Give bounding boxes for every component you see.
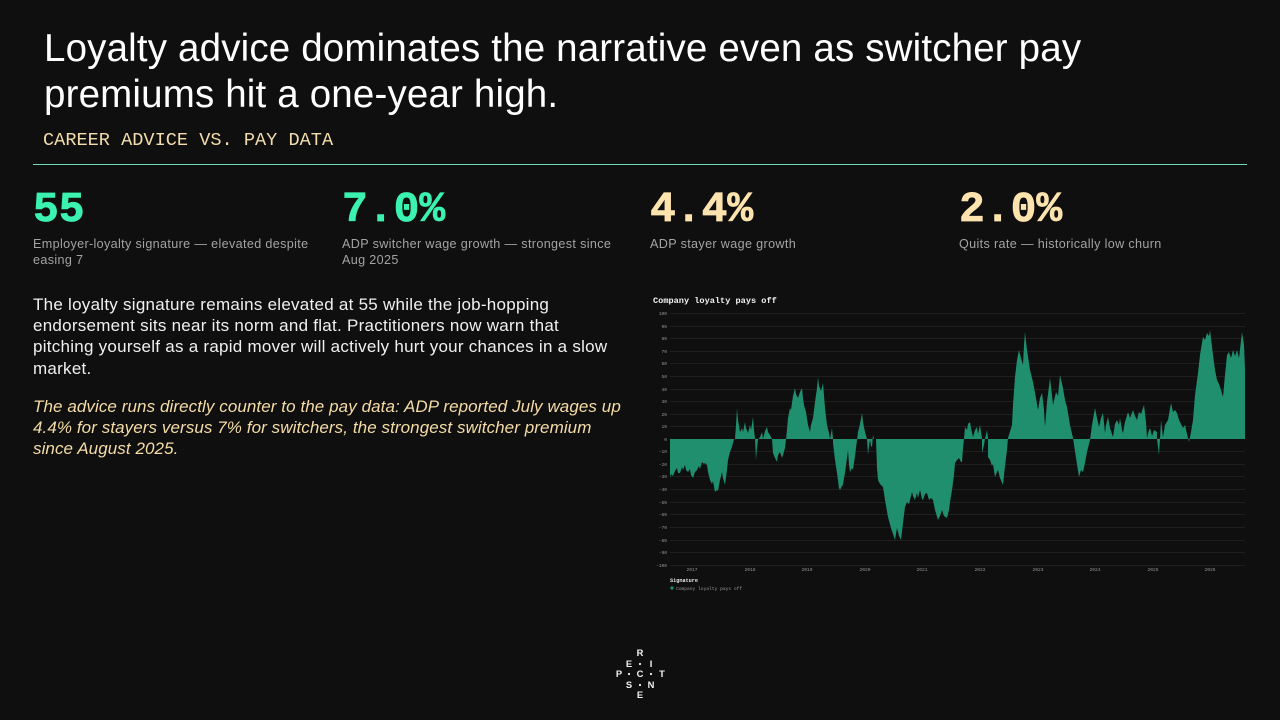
body paragraph: The loyalty signature remains elevated at 55 while the job-hopping	[33, 295, 549, 314]
stat: ADP switcher wage growth: ADP switcher wage growth — strongest since	[342, 237, 611, 251]
y axis labels: -80	[659, 538, 667, 544]
stat: ADP stayer wage growth	[650, 185, 796, 251]
stat: quits rate	[959, 185, 1162, 251]
y axis labels: 90	[661, 324, 667, 330]
y axis labels: 60	[661, 361, 667, 367]
title: Loyalty advice dominates the narrative even as switcher pay	[44, 27, 1081, 70]
body paragraph: endorsement sits near its norm and flat. Practitioners now warn that	[33, 316, 559, 335]
x axis labels: 2019	[801, 567, 813, 573]
body paragraph: pitching yourself as a rapid mover will actively hurt your chances in a slow	[33, 337, 607, 356]
italic callout paragraph	[33, 397, 621, 458]
y axis labels: -30	[659, 474, 667, 480]
x axis labels: 2020	[859, 567, 871, 573]
italic callout paragraph: since August 2025.	[33, 439, 178, 458]
logo: letter diamond	[616, 647, 665, 700]
legend	[670, 578, 742, 592]
area chart: company loyalty pays off	[653, 296, 1245, 592]
y axis labels: -90	[659, 550, 667, 556]
area series	[670, 330, 1245, 540]
stat: employer-loyalty signature: Employer-loyalty signature — elevated despite	[33, 237, 308, 251]
y axis labels: 20	[661, 412, 667, 418]
stat: ADP stayer wage growth: ADP stayer wage growth	[650, 237, 796, 251]
y axis labels: 10	[661, 424, 667, 430]
body paragraph: market.	[33, 359, 92, 378]
y axis labels: 40	[661, 387, 667, 393]
y axis labels: -60	[659, 512, 667, 518]
x axis labels: 2018	[744, 567, 756, 573]
x axis labels: 2022	[974, 567, 986, 573]
subtitle: CAREER ADVICE VS. PAY DATA	[43, 130, 333, 151]
title: premiums hit a one-year high.	[44, 72, 558, 116]
logo: letter diamond: S	[626, 679, 632, 690]
stat: quits rate: 2.0%	[959, 185, 1062, 234]
y axis labels	[656, 311, 667, 569]
logo: letter diamond: P	[616, 668, 622, 679]
logo: letter diamond: E	[626, 658, 632, 669]
logo: letter diamond: I	[650, 658, 652, 669]
italic callout paragraph: 4.4% for stayers versus 7% for switchers, the strongest switcher premium	[33, 418, 591, 437]
y axis labels: 80	[661, 336, 667, 342]
y axis labels: -20	[659, 462, 667, 468]
logo: letter diamond: N	[648, 679, 655, 690]
legend: Signature	[670, 578, 698, 584]
logo: letter diamond: R	[637, 647, 644, 658]
y axis labels: 70	[661, 349, 667, 355]
chart title: Company loyalty pays off	[653, 296, 777, 306]
stat: quits rate: Quits rate — historically low churn	[959, 237, 1162, 251]
stat: ADP switcher wage growth	[342, 185, 611, 267]
x axis labels: 2026	[1204, 567, 1216, 573]
stat: ADP switcher wage growth: 7.0%	[342, 185, 445, 234]
y axis labels: 0	[664, 437, 667, 443]
y axis labels: -10	[659, 449, 667, 455]
x axis labels: 2017	[686, 567, 698, 573]
italic callout paragraph: The advice runs directly counter to the pay data: ADP reported July wages up	[33, 397, 621, 416]
x axis labels	[686, 567, 1216, 573]
logo: letter diamond: T	[659, 668, 665, 679]
y axis labels: 50	[661, 374, 667, 380]
legend: Company loyalty pays off	[676, 586, 742, 592]
x axis labels: 2024	[1089, 567, 1101, 573]
stat: employer-loyalty signature: easing 7	[33, 253, 83, 267]
logo: letter diamond: E	[637, 689, 643, 700]
y axis labels: 100	[659, 311, 667, 317]
body paragraph	[33, 295, 608, 378]
stat: ADP stayer wage growth: 4.4%	[650, 185, 753, 234]
x axis labels: 2025	[1147, 567, 1159, 573]
logo: letter diamond: C	[637, 668, 644, 679]
x axis labels: 2021	[916, 567, 928, 573]
stat: employer-loyalty signature	[33, 185, 308, 267]
y axis labels: -70	[659, 525, 667, 531]
stat: ADP switcher wage growth: Aug 2025	[342, 253, 399, 267]
y axis labels: -50	[659, 500, 667, 506]
y axis labels: 30	[661, 399, 667, 405]
title	[44, 27, 1081, 116]
stat: employer-loyalty signature: 55	[33, 185, 85, 234]
x axis labels: 2023	[1032, 567, 1044, 573]
y axis labels: -40	[659, 487, 667, 493]
y axis labels: -100	[656, 563, 667, 569]
